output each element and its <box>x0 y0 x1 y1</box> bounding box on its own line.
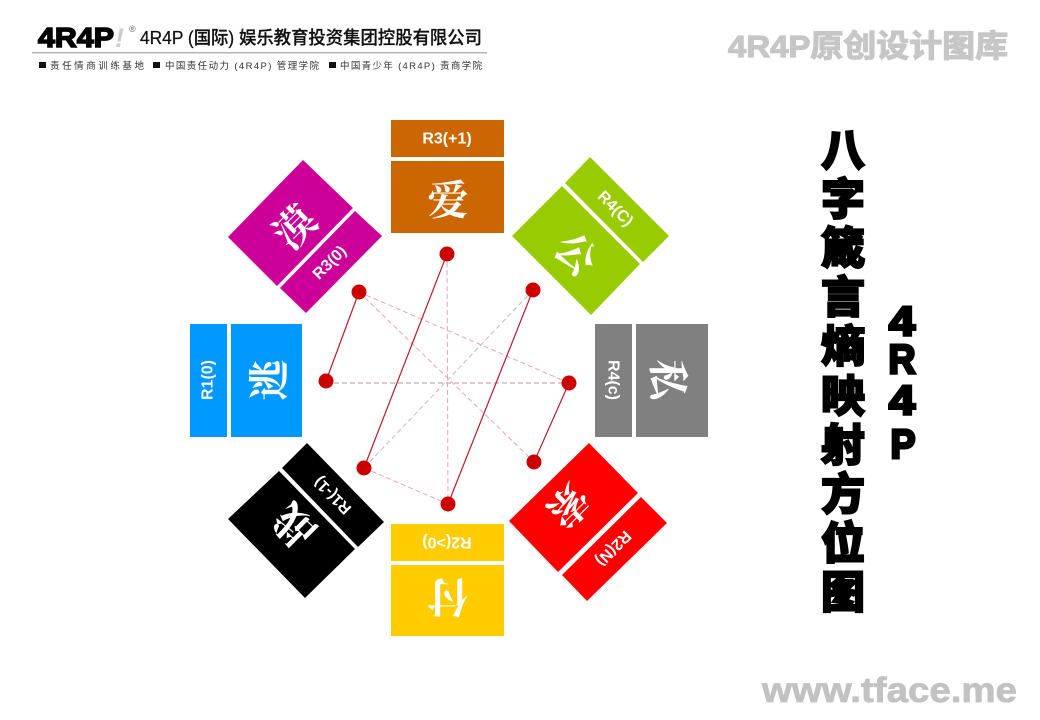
vertical title: 位 <box>821 518 865 568</box>
vertical title: 箴 <box>821 224 865 274</box>
vertical title: 图 <box>821 568 865 618</box>
mapping diagram: connections and nodes <box>318 246 576 512</box>
vertical label: 4R4P: 4 <box>889 377 915 423</box>
tile: bottom-left, fight: 战 <box>258 493 328 563</box>
vertical label: 4R4P: 4 <box>889 298 915 344</box>
tile: right, private: 私 <box>642 360 700 404</box>
company name: 4R4P (国际) 娱乐教育投资集团控股有限公司 <box>140 28 482 48</box>
tile: bottom-left, fight <box>228 443 384 598</box>
dashed connections <box>326 254 569 504</box>
tile: bottom, give: R2(>0) <box>422 534 472 550</box>
tile: bottom-right, demand: R2(N) <box>592 527 634 569</box>
tile: top-left, indifference: 漠 <box>258 190 328 260</box>
vertical title: 言 <box>821 274 865 322</box>
solid connections <box>326 254 569 504</box>
sub-brand: youth college: 中国青少年 (4R4P) 责商学院 <box>340 60 482 72</box>
tile: top-left, indifference: R3(0) <box>310 243 350 283</box>
vertical title: 映 <box>821 372 865 422</box>
tile: top-right, public: 公 <box>543 217 613 287</box>
tile: bottom, give: 付 <box>428 570 468 630</box>
vertical title: 熵 <box>821 322 865 372</box>
tile: top-left, indifference <box>228 160 382 313</box>
vertical label: 4R4P: R <box>888 336 916 382</box>
tile: bottom-left, fight: R1(-1) <box>311 473 355 517</box>
header: company logo and name <box>32 22 487 72</box>
vertical title: 射 <box>821 422 865 470</box>
nodes <box>318 246 576 512</box>
vertical label: 4R4P <box>888 298 916 467</box>
vertical title <box>821 126 865 618</box>
tile: top, love <box>391 120 504 233</box>
watermark: website: www.tface.me <box>761 671 1017 710</box>
watermark: library name: 4R4P原创设计图库 <box>728 29 1008 64</box>
tile: right, private <box>595 324 708 437</box>
logo: 4R4P: 4R4P <box>38 22 114 53</box>
tile: left, flee: 逃 <box>236 358 296 400</box>
tile: left, flee: R1(0) <box>200 360 216 400</box>
sub-brand: management college: 中国责任动力 (4R4P) 管理学院 <box>165 60 319 72</box>
tile: top, love: 爱 <box>426 168 468 226</box>
tile: top-right, public: R4(C) <box>594 188 636 230</box>
tile: bottom-right, demand: 索 <box>535 471 607 543</box>
logo: 4R4P: ! <box>115 23 124 53</box>
tile: top-right, public <box>512 157 669 315</box>
tile: top, love: R3(+1) <box>422 130 472 148</box>
tile: left, flee <box>190 324 302 437</box>
vertical title: 八 <box>821 126 865 176</box>
vertical label: 4R4P: P <box>890 421 916 467</box>
tile: bottom-right, demand <box>509 443 667 601</box>
tile: right, private: R4(c) <box>604 360 622 400</box>
sub-brand: training base: 责任情商训练基地 <box>50 60 144 72</box>
vertical title: 字 <box>821 176 865 224</box>
vertical title: 方 <box>821 470 865 520</box>
tile: bottom, give <box>391 524 504 636</box>
logo: 4R4P: ® <box>129 24 136 34</box>
